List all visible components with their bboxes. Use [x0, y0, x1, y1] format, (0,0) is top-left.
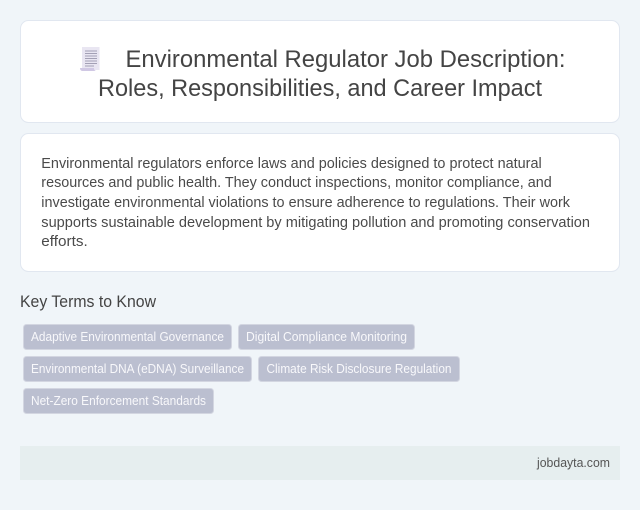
- description text: efforts.: [41, 234, 88, 250]
- description text: supports sustainable development by mitigating pollution and promoting conservation: [41, 215, 590, 231]
- title: [98, 46, 566, 102]
- panel: description card: [20, 134, 620, 272]
- tag: climate risk disclosure regulation: [258, 356, 460, 382]
- tag: climate risk disclosure regulation: Climate Risk Disclosure Regulation: [266, 362, 452, 376]
- panel: title card: [20, 20, 620, 122]
- title: Roles, Responsibilities, and Career Impact: [98, 75, 542, 102]
- tag list: [24, 324, 460, 414]
- tag: environmental dna surveillance: Environmental DNA (eDNA) Surveillance: [31, 362, 244, 376]
- description text: resources and public health. They conduct inspections, monitor compliance, and: [41, 175, 552, 191]
- tag: digital compliance monitoring: Digital Compliance Monitoring: [246, 330, 407, 344]
- description text: investigate environmental violations to ensure adherence to regulations. Their work: [41, 195, 571, 211]
- footer bar: [20, 446, 620, 480]
- description text: Environmental regulators enforce laws and policies designed to protect natural: [41, 156, 542, 172]
- tag: environmental dna surveillance: [24, 356, 252, 382]
- footer text: jobdayta.com: [536, 456, 610, 470]
- icon: document scroll: [80, 47, 100, 71]
- heading: key terms: Key Terms to Know: [20, 293, 156, 311]
- tag: adaptive environmental governance: [24, 324, 232, 350]
- tag: net-zero enforcement standards: [24, 388, 214, 414]
- tag: adaptive environmental governance: Adaptive Environmental Governance: [31, 330, 224, 344]
- title: Environmental Regulator Job Description:: [126, 46, 566, 73]
- description text: [41, 156, 590, 250]
- tag: digital compliance monitoring: [238, 324, 414, 350]
- tag: net-zero enforcement standards: Net-Zero Enforcement Standards: [31, 394, 206, 408]
